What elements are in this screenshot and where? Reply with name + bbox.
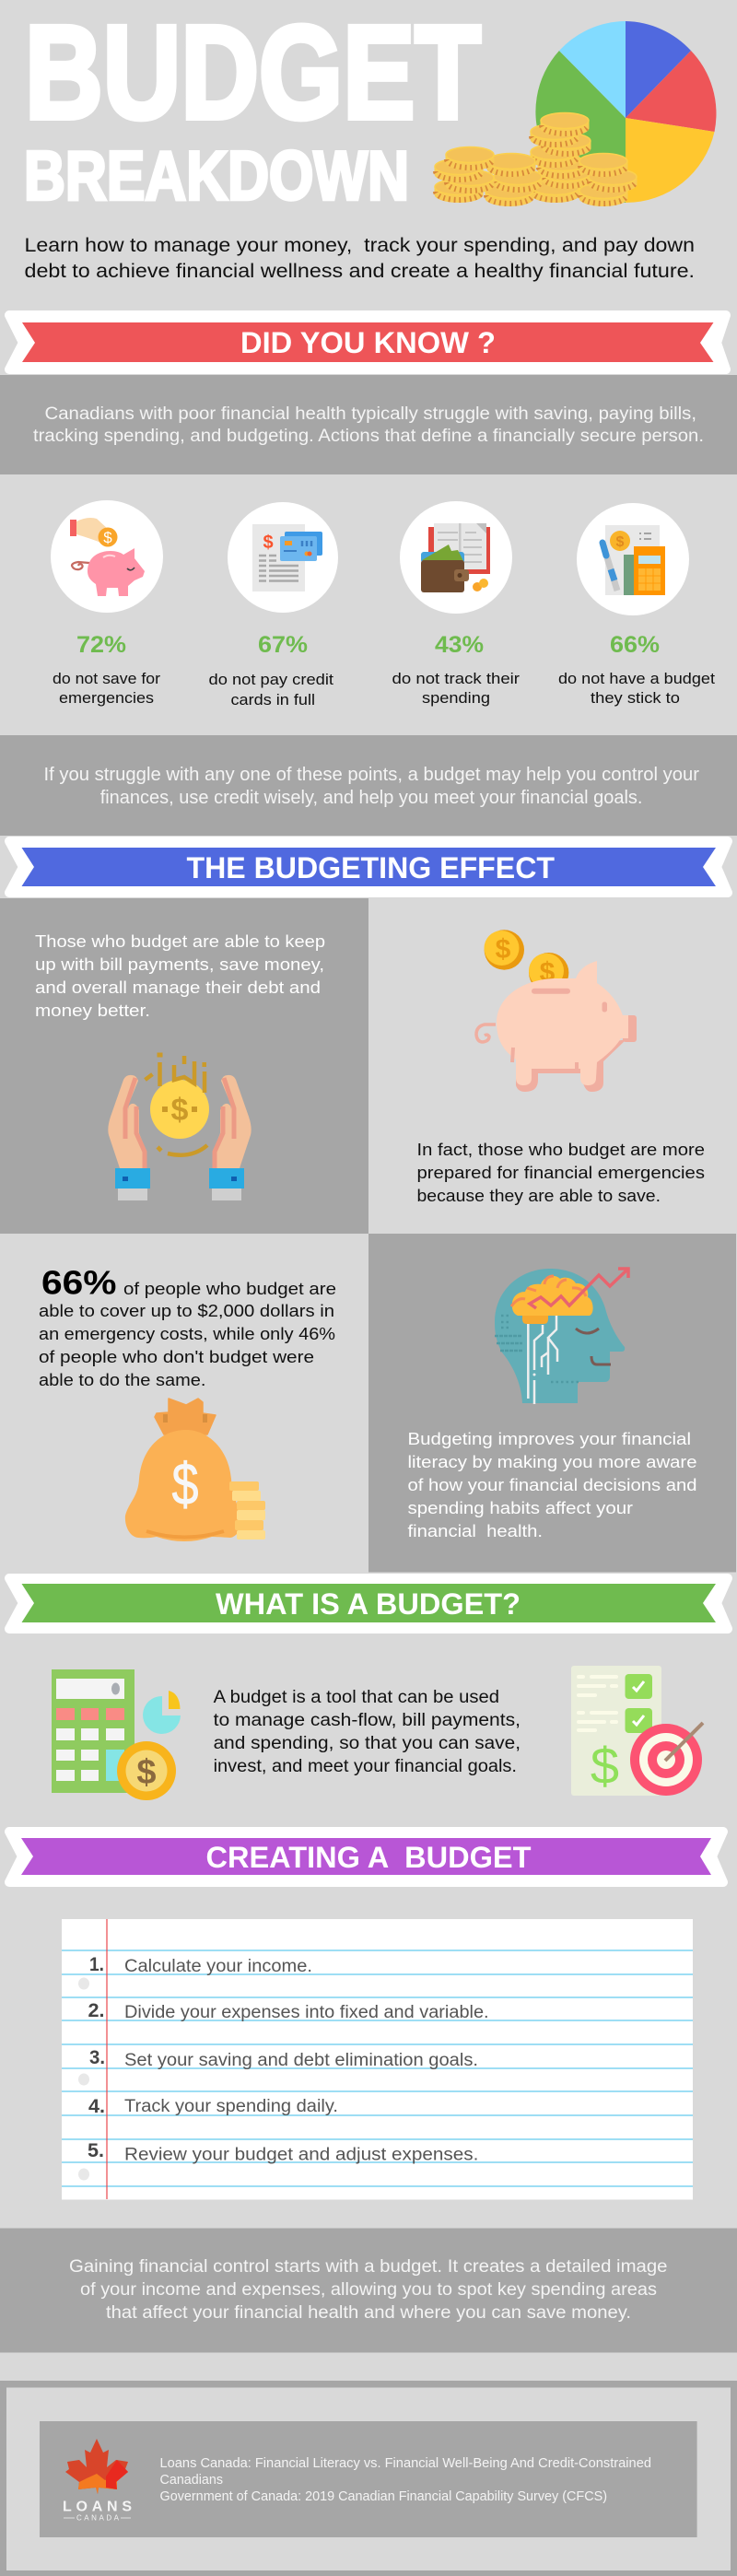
icon: calculator, pen and paper	[577, 503, 689, 615]
text block	[35, 931, 325, 1020]
icon: calculator, pen and paper: $	[616, 534, 625, 550]
icon: wallet and book	[400, 501, 512, 614]
icon: hands holding coin	[108, 1052, 252, 1200]
banner: creating a budget	[9, 1832, 723, 1882]
text block: and overall manage their debt and	[35, 978, 321, 997]
text block: able to do the same.	[39, 1370, 205, 1389]
step 1	[89, 1954, 312, 1976]
logo: Loans Canada: LOANS	[63, 2499, 132, 2515]
label: do not have a budget	[558, 670, 715, 687]
panel: canadians intro band: tracking spending, and budgeting. Actions that define a financially secure person.	[33, 427, 704, 446]
text block: money better.	[35, 1001, 150, 1020]
text block	[407, 1429, 696, 1540]
step 1: 1.	[89, 1954, 104, 1975]
icon: receipt and credit cards	[228, 502, 338, 613]
step 4: Track your spending daily.	[124, 2097, 338, 2116]
percentage: 72%	[76, 632, 126, 658]
stat: 66 percent do not have a budget	[558, 503, 715, 707]
step 5: 5.	[88, 2140, 104, 2161]
step 2: Divide your expenses into fixed and variable.	[124, 2003, 489, 2022]
stat: 43 percent do not track	[392, 501, 520, 707]
percentage: 67%	[258, 632, 308, 658]
text block: 66%	[41, 1264, 116, 1301]
percentage: 43%	[435, 632, 484, 658]
text block: prepared for financial emergencies	[416, 1163, 705, 1182]
step 4: 4.	[88, 2096, 105, 2117]
icon: piggy bank with coins: $	[496, 934, 511, 965]
icon: piggy bank with coins	[476, 930, 637, 1092]
text block: In fact, those who budget are more	[416, 1140, 705, 1159]
panel: budget may help band: If you struggle with any one of these points, a budget may help you control your	[44, 765, 699, 785]
label	[53, 670, 160, 707]
panel: gaining financial control band: of your income and expenses, allowing you to spot key spending areas	[80, 2280, 657, 2300]
text block: spending habits affect your	[407, 1498, 633, 1517]
panel: financial literacy	[368, 1234, 736, 1572]
notebook: budget steps	[62, 1919, 693, 2200]
text block: literacy by making you more aware	[407, 1452, 696, 1471]
icon: piggy bank and hand	[51, 500, 163, 613]
icon: calculator with chart and coin: $	[136, 1753, 157, 1792]
icon: receipt and credit cards: $	[263, 533, 274, 553]
panel: gaining financial control band: that affect your financial health and where you can save money.	[106, 2303, 631, 2323]
step 2: 2.	[88, 2000, 105, 2021]
label	[558, 670, 715, 707]
label: they stick to	[591, 689, 680, 707]
label: do not track their	[392, 670, 520, 687]
text block: of how your financial decisions and	[407, 1475, 696, 1494]
logo: Loans Canada	[63, 2439, 132, 2523]
panel: prepared for emergencies	[416, 930, 705, 1205]
text block: of people who budget are	[123, 1279, 336, 1298]
icon: money bag: $	[171, 1451, 199, 1517]
step 1: Calculate your income.	[124, 1957, 312, 1976]
icon: calculator with chart and coin	[52, 1669, 181, 1800]
step 5: Review your budget and adjust expenses.	[124, 2145, 478, 2165]
icon: checklist and target: $	[591, 1737, 619, 1795]
text block: of people who don't budget were	[39, 1347, 314, 1366]
panel: gaining financial control band	[0, 2228, 737, 2353]
intro text	[24, 235, 695, 282]
text block: because they are able to save.	[416, 1186, 661, 1205]
icon: coin stacks	[435, 112, 638, 206]
text block: definition	[214, 1688, 521, 1776]
label: cards in full	[230, 691, 315, 708]
intro text: debt to achieve financial wellness and create a healthy financial future.	[24, 261, 695, 282]
label: emergencies	[59, 689, 154, 707]
step 5	[88, 2140, 478, 2165]
panel: canadians intro band: Canadians with poor financial health typically struggle with saving, paying bills,	[44, 404, 696, 424]
label: do not pay credit	[208, 671, 333, 688]
icon: checklist and target	[571, 1666, 703, 1796]
text block: definition: invest, and meet your financial goals.	[214, 1757, 517, 1776]
title: Budget: BUDGET	[25, 0, 481, 146]
step 3: Set your saving and debt elimination goals.	[124, 2051, 478, 2070]
icon: piggy bank with coins: $	[540, 957, 556, 988]
sources text: Loans Canada: Financial Literacy vs. Financial Well-Being And Credit-Constrained	[160, 2455, 651, 2471]
logo: Loans Canada: CANADA	[76, 2513, 120, 2523]
banner: what is a budget	[9, 1578, 728, 1629]
banner: creating a budget: CREATING A BUDGET	[206, 1841, 532, 1874]
text block: definition: A budget is a tool that can be used	[214, 1688, 499, 1707]
footer: sources panel	[0, 2381, 737, 2576]
stat: 72 percent do not save	[51, 500, 163, 707]
banner: did you know: DID YOU KNOW ?	[240, 326, 496, 359]
panel: 66 percent emergency costs	[39, 1264, 336, 1541]
sources text: Canadians	[160, 2472, 223, 2488]
label: do not save for	[53, 670, 160, 687]
label: spending	[422, 689, 490, 707]
step 3: 3.	[89, 2047, 105, 2068]
label	[392, 670, 520, 707]
text block: financial health.	[407, 1521, 543, 1540]
title: Breakdown: BREAKDOWN	[24, 136, 409, 214]
text block: definition: and spending, so that you can save,	[214, 1734, 521, 1753]
panel: gaining financial control band: Gaining financial control starts with a budget. It creates a detailed image	[69, 2257, 667, 2277]
text block: up with bill payments, save money,	[35, 954, 324, 974]
sources text	[160, 2455, 651, 2504]
icon: head with brain	[495, 1269, 628, 1404]
intro text: Learn how to manage your money, track your spending, and pay down	[24, 235, 695, 256]
banner: did you know	[9, 315, 726, 369]
pie chart	[535, 21, 716, 203]
percentage: 66%	[610, 632, 660, 658]
text block: able to cover up to $2,000 dollars in	[39, 1301, 334, 1320]
panel: budget may help band: finances, use credit wisely, and help you meet your financial goals.	[100, 788, 642, 808]
text block: an emergency costs, while only 46%	[39, 1324, 335, 1343]
panel: canadians intro band	[0, 375, 737, 474]
icon: money bag	[125, 1399, 265, 1541]
stat: 67 percent do not pay cards	[208, 502, 338, 708]
text block: Budgeting improves your financial	[407, 1429, 691, 1448]
banner: the budgeting effect	[9, 841, 728, 893]
text block	[39, 1264, 336, 1389]
text block: definition: to manage cash-flow, bill payments,	[214, 1711, 521, 1730]
panel: those who budget	[0, 898, 368, 1234]
text block	[416, 1140, 705, 1205]
text block: Those who budget are able to keep	[35, 931, 325, 951]
sources text: Government of Canada: 2019 Canadian Financial Capability Survey (CFCS)	[160, 2488, 607, 2504]
label	[208, 671, 333, 708]
icon: hands holding coin: $	[171, 1093, 189, 1128]
banner: what is a budget: WHAT IS A BUDGET?	[216, 1587, 521, 1621]
panel: budget may help band	[0, 735, 737, 836]
icon: piggy bank and hand: $	[103, 529, 112, 546]
banner: the budgeting effect: THE BUDGETING EFFECT	[186, 851, 555, 884]
